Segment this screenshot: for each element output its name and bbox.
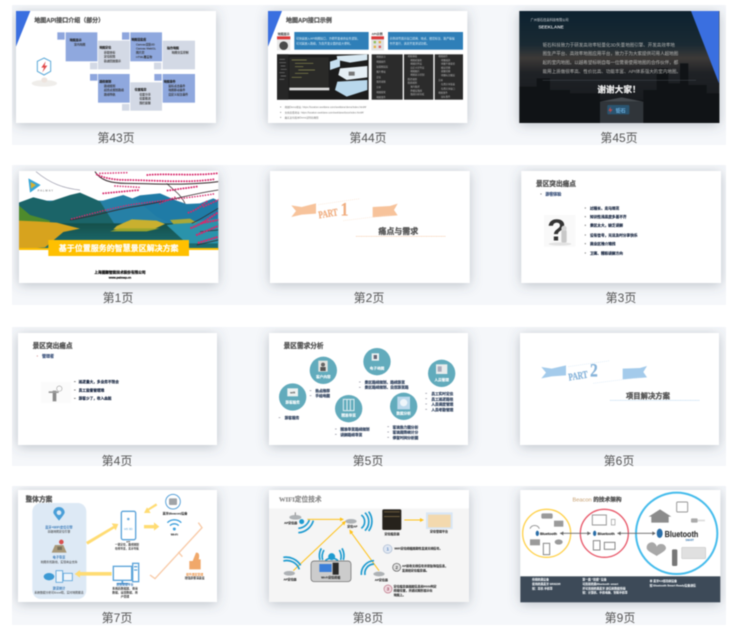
icon: company logo: 钜石	[616, 107, 626, 114]
text block: company name: SEEKLANE	[538, 24, 564, 29]
landscape photo with blossoms	[19, 172, 218, 250]
callout: step 3: 地图上。	[394, 592, 406, 597]
icon: server: 定位服务器	[385, 531, 399, 536]
chart: API feature tiles: 位置推送	[139, 97, 151, 101]
text: app description: 一键定位，路线规划	[115, 543, 139, 547]
list: visitor pain points: 景区太大，缺乏讲解	[590, 223, 623, 228]
label: page 45: 第45页	[600, 131, 638, 145]
panel: slide 3 pain points	[521, 171, 721, 283]
panel: API menu column 3: 视图切换	[441, 69, 451, 73]
label: page 43: 第43页	[97, 131, 135, 145]
label: page 2: 第2页	[354, 291, 384, 305]
list: visitor pain points	[585, 205, 638, 255]
ribbon: part 2	[541, 359, 647, 383]
chart: API feature tiles: 鼠标点击事件	[168, 84, 185, 88]
chart: API feature tiles: 获取坐标	[104, 50, 115, 54]
panel: bottom notes band: 如：计算机、手机电脑、智能手机等	[582, 591, 628, 595]
text block: company statement: 起的室内地图。以越希望标明自每一位需要使用地图的合作伙伴，都	[543, 59, 679, 66]
node: customer content: 客户内容	[316, 374, 331, 379]
icon: map with pin	[52, 540, 67, 553]
panel: bottom notes band: 如 Bluetooth Smart Ready设备通信	[650, 583, 696, 587]
panel: API menu column 2	[404, 54, 433, 100]
text block: company: www.palmap.cn	[108, 276, 131, 280]
panel: slide 45 thank you	[519, 11, 719, 123]
logo triangle: PALWAY	[38, 188, 54, 192]
panel: API menu column 3: 位置共享接口	[441, 86, 456, 90]
panel: API menu column 2: 路线规划	[408, 81, 418, 85]
panel: API menu column 3: 地图操作	[438, 54, 448, 58]
icon: question mark figure: ?	[547, 214, 566, 248]
text: benefit: 增强游客满意度	[185, 576, 205, 580]
node: electronic map: 电子地图	[370, 365, 385, 370]
text: app description: APP	[126, 541, 131, 544]
node: visitor service: wifi	[289, 390, 295, 394]
node: electronic map: 景区路线规划、自然游览路	[365, 385, 409, 390]
panel: bottom notes band: 如：耳机 手机等	[532, 586, 553, 590]
panel: slide 43 API introduction	[16, 11, 216, 123]
row 3 background	[12, 327, 726, 466]
text block: demo links	[280, 105, 367, 120]
label: page 8: 第8页	[353, 611, 383, 625]
ribbon: part 1: 1	[341, 198, 348, 220]
panel: API menu column 2: 地图控件层	[410, 62, 423, 66]
text: app description	[115, 541, 139, 550]
text: audience: 游客体验	[545, 190, 561, 196]
panel: slide 5 needs analysis	[269, 333, 468, 445]
label: page 6: 第6页	[604, 454, 634, 468]
panel: API menu column 1: 地图搜索	[376, 90, 386, 94]
chart: API feature tiles	[57, 32, 195, 111]
panel: positioning services: 基础地图定位引擎	[48, 529, 70, 533]
icon: management screen: 定位管理平台	[430, 528, 448, 533]
icon: company logo	[607, 105, 629, 114]
node: precise guide: 精准导览	[341, 412, 356, 417]
panel: slide 2 part 1	[270, 171, 470, 283]
text: backend description: 数据、运营数据、用	[112, 591, 138, 595]
chart: API feature tiles: 地图显示	[70, 37, 82, 42]
panel: API menu column 3: 位置分享链接	[441, 82, 456, 86]
panel: API menu column 1	[372, 54, 403, 100]
label: page 1: 第1页	[103, 291, 133, 305]
chart: dual mode circle: Bluetooth	[598, 532, 615, 536]
panel: slide 7 overall solution	[18, 490, 217, 602]
city photo background	[519, 11, 719, 123]
icon: question mark figure	[544, 214, 575, 248]
icon: AP 3	[283, 557, 301, 582]
text block: demo links: 最近发布版本Demo说明和教程	[285, 116, 319, 120]
callout: API example description	[388, 32, 463, 50]
ribbon: part 2: 2	[590, 359, 598, 381]
text block: company name: 广州钜石信息科技有限公司	[531, 17, 569, 22]
icon: location pin	[53, 507, 65, 521]
callout: step 2	[393, 563, 448, 572]
row 3: slides 4 to 6	[18, 333, 719, 468]
icon: phone: H5 3D	[124, 527, 133, 531]
text: audience: 管理者	[42, 352, 54, 358]
chart: bluetooth smart circle	[636, 493, 717, 574]
arrows: signal flow	[293, 517, 424, 571]
callout: map display description: 可快速嵌入API地图接口，方便开发者的业务逻辑，	[296, 36, 360, 40]
chart: API feature tiles: 位置服务	[135, 87, 147, 92]
node: customer content: 热点推荐	[315, 388, 330, 393]
panel: bottom notes band: 传统经典设备	[532, 578, 549, 582]
callout: API example description: 示例详尽展示接口调用、地点、楼层标注、路产等操	[390, 36, 455, 40]
icon: AP 4: AP定位器	[375, 577, 388, 582]
icon: map display gear: 地图展示	[278, 31, 290, 36]
icon: AP 2	[345, 512, 372, 531]
panel: API menu column 3: 地图事件	[438, 91, 448, 95]
arrow: computer to panel	[75, 570, 112, 578]
panel: API menu column 2: 室内路径	[410, 85, 420, 89]
panel: API menu column 3: 地图标注图层	[441, 73, 456, 77]
panel: positioning services: 系统数据分析可Excel端，实时地图报表	[34, 591, 84, 595]
icon: AP 2: 定位AP	[347, 524, 357, 529]
icon: API grid: API示例	[372, 31, 383, 36]
label: page 4: 第4页	[102, 454, 132, 468]
node: staff management: 人员管理	[434, 377, 449, 382]
text: benefit	[185, 572, 205, 580]
yellow stripe	[19, 248, 218, 250]
chart: API feature tiles: 起终点规划路线	[104, 88, 124, 92]
ribbon: part 1: PART	[318, 206, 339, 221]
panel: API menu column 1: 定位	[376, 75, 382, 79]
chart: API feature tiles: 位置分享	[139, 92, 151, 96]
heading: project solution: 项目解决方案	[626, 391, 671, 400]
callout: step 2: 2	[395, 565, 398, 570]
heading: slide 44 title: 地图API接口示例	[286, 17, 332, 25]
text: audience	[37, 352, 54, 358]
arrow: positioning to phone	[86, 523, 118, 545]
node: staff management: 员工实时定位	[431, 391, 454, 396]
heading: thank you: 谢谢大家！	[597, 83, 641, 94]
chart: API feature tiles: 地图定位	[99, 45, 111, 50]
heading: slide 5 title: 景区需求分析	[284, 341, 324, 350]
arrows: links between circles	[560, 531, 656, 535]
text block: company statement: 图生产平台、高效率地图应用平台，致力于为大家提供可用人超地图	[543, 50, 679, 57]
chart: API feature tiles: 路线导航	[104, 92, 115, 96]
icon: thumbs up	[189, 553, 201, 569]
icon: wifi	[167, 520, 181, 536]
panel: positioning services: 电子导览	[53, 554, 65, 559]
blue corner triangle	[16, 11, 30, 47]
callout: step 1: 1	[386, 547, 389, 552]
text block: company statement: 钜石科技致力于研发高效率轻量化3D矢量地图引擎、开发高效率地	[543, 41, 675, 48]
blue corner triangle	[268, 11, 282, 47]
panel: API menu column 2: 地图基础	[408, 54, 418, 58]
heading: pain points and needs: 痛点与需求	[378, 226, 418, 236]
chart: bluetooth smart circle: SMART	[686, 539, 694, 542]
label: page 7: 第7页	[102, 611, 132, 625]
chart: API feature tiles: Canvas WebGL	[136, 46, 156, 50]
panel: API menu column 1: 图片叠加	[376, 70, 386, 74]
icon: orange bracket	[150, 523, 202, 579]
icon: wifi positioning device: Wi-Fi定位终端	[321, 575, 340, 580]
chart: dual mode circle	[580, 509, 628, 557]
callout: step 2: AP接收无线信号并获取场强信息，	[402, 563, 448, 568]
node: electronic map: 景区路线规划、路线游览	[365, 379, 405, 384]
node: staff management	[425, 360, 455, 412]
icon: beacon	[163, 494, 187, 515]
chart: API feature tiles: 地图渲染库	[131, 37, 146, 42]
node: scenic big data: 停留时间分析图	[393, 435, 419, 440]
list: manager pain points: 员工监督管理难	[79, 387, 105, 392]
heading: slide 4 title: 景区突出痛点	[33, 341, 73, 350]
panel: bottom notes band: 使用经典蓝牙 BR/EDR	[532, 582, 561, 586]
node: customer content	[310, 357, 337, 398]
ribbon: part 2: PART	[568, 369, 589, 383]
panel: API menu column 2: 路线分析导航	[410, 92, 425, 96]
row 2 background	[12, 165, 726, 305]
panel: positioning services: 地图查找路线，实现商业支持	[41, 560, 78, 564]
callout: map display description: 可对其嵌入路線，为您开发全面的最大便利。	[296, 41, 353, 45]
panel: API menu column 1: 地图操作	[376, 60, 386, 64]
panel: bottom notes band: 第一类 “双模” 设备	[582, 578, 607, 582]
list: manager pain points: 巡逻量大，多业务不饱合	[79, 379, 119, 384]
row 4 background	[12, 486, 726, 625]
text block: demo links: 地图Demo地址: https://location.seeklane.com/seeklane/demo/index.html#/	[285, 105, 367, 109]
chart: API feature tiles: HTML覆盖物	[136, 55, 152, 59]
callout: step 3: 终端位置，并通过图形展示在	[394, 588, 432, 593]
chart: API feature tiles: 操作地图	[167, 45, 179, 50]
text: app description: 在线导览，离开导航	[115, 546, 139, 550]
node: scenic big data: 客流趋势统计分	[393, 430, 419, 435]
title band	[269, 490, 469, 508]
list: visitor pain points: 商业区推介难找	[590, 241, 616, 246]
icon: computer	[113, 563, 139, 584]
icon: wifi positioning device	[311, 548, 351, 582]
chart: API feature tiles: 图片层	[136, 51, 145, 55]
icon: AP 4	[361, 561, 388, 582]
panel: positioning services: 蓝牙+WiFi定位引擎	[45, 524, 74, 529]
arrow: phone to wifi	[144, 522, 159, 531]
icon: phone	[121, 511, 136, 540]
node: visitor service: 游客服务	[285, 415, 300, 420]
panel: API menu column 1: 地图显示	[376, 54, 386, 58]
node: visitor service: 游客服务	[285, 399, 300, 404]
list: manager pain points	[74, 379, 119, 401]
text block: company: 上海图聚智能技术股份有限公司	[94, 269, 146, 274]
label: page 44: 第44页	[349, 131, 387, 145]
chart: API feature tiles: 定位权限	[104, 55, 115, 59]
icon: API grid	[371, 31, 384, 50]
chart: API feature tiles: 轨迹回放展示	[104, 59, 121, 63]
chart: API feature tiles: 地图事件	[164, 79, 176, 84]
callout: map display description	[294, 32, 369, 50]
row 2: slides 1 to 3	[19, 171, 721, 305]
text block: company name	[531, 17, 569, 29]
panel: slide 9 beacon architecture	[520, 490, 720, 602]
panel: API menu column 3	[435, 54, 463, 100]
node: staff management: 人员调度管理	[431, 402, 454, 407]
panel: slide 8 wifi positioning	[269, 490, 469, 602]
text: backend description: 户管理	[121, 595, 129, 599]
text: audience	[540, 190, 561, 196]
node: precise guide: 讲解路线导览	[340, 432, 363, 437]
panel: bottom notes band: 并可连接经典蓝牙 通信和数据传输	[582, 586, 626, 590]
node: precise guide: 精准导览路线规划	[340, 427, 370, 432]
dotted underline	[610, 399, 700, 401]
chart: API feature tiles: 地图交互控制	[172, 50, 189, 54]
chart: classic bluetooth circle	[523, 509, 571, 557]
list: visitor pain points: 卫离、精彩讲解方向	[590, 250, 623, 255]
panel: positioning services: 游览统计	[53, 586, 66, 591]
icon: phone: ✱	[127, 517, 131, 522]
panel: API menu column 1: 路径规划	[376, 80, 386, 84]
text: backend description	[112, 583, 138, 599]
callout: step 3: 定位服务器根据信息和RSSI判定	[394, 583, 436, 588]
dotted underline	[356, 235, 446, 237]
panel: code editor and map screenshot	[277, 54, 369, 100]
heading: slide 43 title: 地图API接口介绍（部分）	[34, 17, 104, 25]
panel: API menu column 3: 地图平移旋转	[441, 62, 456, 66]
label: page 9: 第9页	[605, 611, 635, 625]
icon: figure with magnifier	[41, 382, 71, 403]
node: scenic big data: 数据分析	[396, 411, 411, 416]
text: backend description: 后台管理平台	[117, 583, 134, 587]
chart: API feature tiles: Canvas渲染2D	[136, 42, 155, 46]
icon: cloud and devices	[44, 571, 72, 582]
arrow: beacon to phone	[144, 503, 157, 513]
panel: slide 1 cover	[19, 171, 218, 283]
logo triangle	[28, 178, 54, 193]
icon: map display gear	[277, 31, 290, 50]
chart: API feature tiles: 自定义标注事件	[168, 92, 188, 96]
panel: bottom notes band	[520, 576, 720, 602]
icon: shield logo	[32, 58, 57, 87]
blue corner triangle	[691, 11, 719, 83]
node: scenic big data	[387, 393, 419, 440]
chart: API feature tiles: 路径规划	[99, 79, 111, 84]
panel: positioning services	[32, 503, 86, 599]
chart: bluetooth smart circle: Bluetooth	[665, 530, 699, 539]
heading: slide 8 title: WIFI定位技术	[279, 495, 322, 504]
heading: slide 7 title: 整体方案	[26, 495, 53, 504]
panel: API menu column 2: 跨楼层路线	[410, 88, 423, 92]
panel: slide 4 manager pain points	[18, 333, 217, 445]
divider line	[542, 80, 696, 81]
heading: slide 9 title: Beacon 的技术架构	[572, 496, 622, 504]
node: staff management: 人员考勤管理	[431, 407, 454, 412]
panel: API menu column 1: 分享	[376, 85, 382, 89]
panel: API menu column 3: 分享	[438, 78, 444, 82]
node: visitor service	[279, 383, 306, 420]
row 1 background	[12, 5, 726, 145]
panel: bottom notes band: 可连接经典Bluetooth smart	[582, 582, 618, 586]
panel: API menu column 2: 路径规划	[408, 77, 418, 81]
panel: API menu column 1: 地图事件	[376, 95, 386, 99]
chart: classic bluetooth circle: Bluetooth	[540, 532, 557, 536]
text block: demo links: 文档查看地址: https://location.seeklane.com/seeklane/docs/index.html#/	[285, 110, 364, 114]
chart: API feature tiles: 围栏提醒	[139, 101, 151, 105]
node: electronic map	[359, 348, 409, 390]
list: manager pain points: 游客少了，收入血脏	[79, 396, 112, 401]
callout: step 3: 3	[387, 587, 390, 592]
panel: API menu column 3: 楼层切换	[441, 65, 451, 69]
heading: cover title	[48, 240, 189, 256]
panel: API menu column 3: 地图缩放	[441, 58, 451, 62]
chart: API feature tiles: 地图移动事件	[168, 88, 185, 92]
panel: API menu column 1: 加载图层层	[376, 65, 389, 69]
list: visitor pain points: 知识性浅显度多差不齐	[590, 214, 627, 219]
text block: company statement: 能用上质做很率高、性价比高、功能丰富、API体系强大的室内地图。	[543, 68, 681, 75]
icon: AP 1	[284, 512, 313, 533]
heading: cover title: 基于位置服务的智慧景区解决方案	[59, 243, 179, 253]
callout: step 2: 发送给定位服务器。	[402, 567, 429, 572]
panel: slide 44 API examples	[268, 11, 467, 123]
panel: slide 6 part 2	[520, 333, 719, 445]
ribbon: part 1	[291, 198, 398, 221]
callout: step 1: WiFi定位终端周期性发送无线信号。	[394, 545, 442, 550]
node: staff management: 员工巡逻路径	[431, 396, 454, 401]
list: visitor pain points: 过程长、走马观花	[590, 205, 620, 210]
panel: API menu column 2: 地图初始化	[410, 58, 423, 62]
label: page 5: 第5页	[353, 454, 383, 468]
panel: bottom notes band: 单 蓝牙4.0低功耗设备	[650, 579, 677, 583]
icon: AP 3: AP定位器	[283, 577, 297, 582]
heading: slide 3 title: 景区突出痛点	[536, 179, 576, 188]
chart: API feature tiles: 路线规划	[104, 84, 115, 88]
icon: server	[382, 509, 401, 536]
panel: API menu column 3: 鼠标事件	[441, 95, 451, 99]
node: scenic big data: 客流热力图分析	[393, 424, 419, 429]
callout: API example description: 作开发行，满足开发测试功能。	[390, 41, 429, 45]
icon: beacon: 蓝牙(Beacon)设备	[163, 510, 187, 515]
node: precise guide	[335, 395, 370, 437]
text: backend description: 系统后数据展、查询	[112, 587, 138, 591]
icon: management screen	[426, 512, 453, 533]
icon: wifi: Wi-Fi	[171, 532, 178, 536]
panel: API menu column 2: 地图显示控制	[410, 73, 425, 77]
callout: step 3	[384, 583, 436, 597]
row 1: slides 43 to 45	[16, 11, 719, 145]
label: page 3: 第3页	[606, 291, 636, 305]
text block: company statement	[543, 41, 681, 75]
icon: AP 1: AP定位器	[284, 520, 297, 525]
panel: API menu column 2: 自定义控件层	[410, 65, 425, 69]
chart: API feature tiles: 室内地图	[74, 42, 85, 46]
text block: company	[94, 269, 146, 280]
node: customer content: 手绘地图	[315, 393, 330, 398]
callout: step 1	[383, 545, 442, 553]
row 4: slides 7 to 9	[18, 490, 720, 625]
list: visitor pain points: 没有信号，无法及时分享快乐	[590, 232, 638, 237]
text: benefit: 提升景区管理	[186, 572, 203, 576]
panel: API menu column 2: 地图图片	[410, 69, 420, 73]
